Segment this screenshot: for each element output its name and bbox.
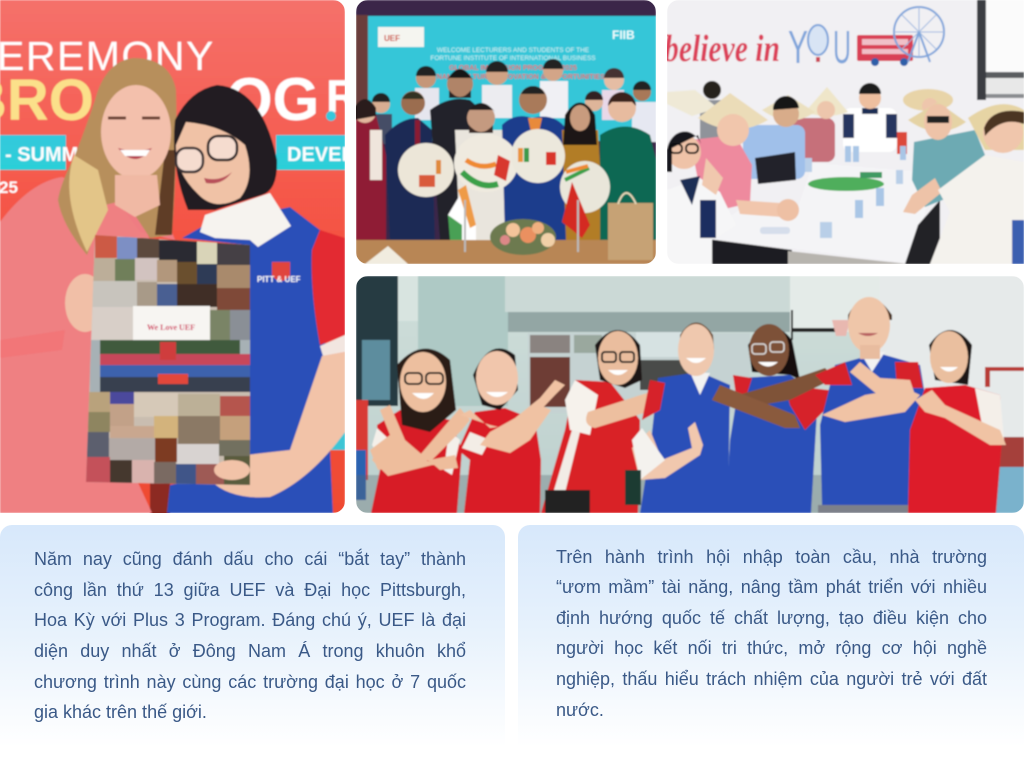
projection screen: FIIB bbox=[612, 28, 635, 42]
left paragraph: Năm nay cũng đánh dấu cho cái “bắt tay” thành bbox=[34, 549, 466, 569]
wall slogan: Y bbox=[788, 21, 808, 73]
student 1 in red bbox=[370, 349, 470, 513]
front students bbox=[667, 93, 1024, 264]
left student in pink ao dai bbox=[0, 58, 176, 513]
right paragraph: người học kết nối tri thức, mở rộng cơ hội nghề bbox=[556, 638, 987, 658]
backdrop banner text bbox=[0, 33, 359, 515]
projection screen bbox=[368, 16, 656, 141]
photo collage bbox=[0, 0, 1024, 513]
left paragraph: chương trình này cùng các trường đại học ở 7 quốc bbox=[34, 672, 466, 692]
photo: students making heart gestures bbox=[356, 276, 1024, 513]
student 4 in blue bbox=[625, 322, 730, 513]
left paragraph: công lần thứ 13 giữa UEF và Đại học Pittsburgh, bbox=[34, 580, 466, 600]
right paragraph: “ươm mầm” tài năng, nâng tầm phát triển với nhiều bbox=[556, 577, 987, 597]
right paragraph: nghiệp, thấu hiểu trách nhiệm của người trẻ với đất bbox=[556, 669, 987, 689]
right student in blue and red polo: PITT & UEF bbox=[257, 275, 301, 284]
right paragraph: nước. bbox=[556, 700, 604, 720]
under-table legs bbox=[695, 200, 940, 264]
backdrop banner text: DEVEL bbox=[287, 144, 354, 166]
painted conical hats bbox=[398, 129, 610, 213]
left paragraph: diện duy nhất ở Đông Nam Á trong khuôn khổ bbox=[34, 641, 466, 661]
student 2 in red bbox=[458, 348, 565, 513]
front row of people bbox=[354, 69, 656, 252]
backdrop banner text: EREMONY bbox=[0, 33, 215, 79]
projection screen: VIETNAM - CULTURE, INNOVATION & OPPORTUNITIES bbox=[421, 74, 605, 81]
backdrop banner text: OG bbox=[226, 66, 319, 133]
gym background bbox=[356, 276, 1024, 513]
backdrop banner text: - SUMM bbox=[5, 144, 78, 166]
right paragraph bbox=[556, 547, 987, 720]
text panel: left bbox=[0, 525, 505, 747]
wall slogan: U bbox=[833, 21, 851, 73]
projection screen: GLOBAL IMMERSION PROGRAM 2025 bbox=[449, 65, 577, 72]
left paragraph: Hoa Kỳ với Plus 3 Program. Đáng chú ý, UEF là đại bbox=[34, 610, 466, 630]
student 5 in blue and red bbox=[711, 323, 830, 513]
backdrop banner text: R bbox=[326, 70, 359, 122]
collage book: We Love UEF bbox=[147, 323, 195, 332]
projection screen: UEF bbox=[384, 34, 400, 43]
text panel: right bbox=[518, 525, 1024, 747]
student 6 in blue and red bbox=[815, 297, 925, 513]
right paragraph: Trên hành trình hội nhập toàn cầu, nhà trường bbox=[556, 547, 987, 567]
fingers on book bbox=[214, 460, 250, 480]
wall slogan bbox=[664, 7, 944, 73]
photo: delegation with painted conical hats bbox=[354, 0, 656, 264]
left paragraph: gia khác trên thế giới. bbox=[34, 702, 207, 722]
student 7 in red bbox=[908, 330, 1006, 513]
collage book bbox=[80, 230, 255, 490]
photo: two students holding a collage book bbox=[0, 0, 359, 515]
projection screen: FORTUNE INSTITUTE OF INTERNATIONAL BUSINESS bbox=[430, 55, 596, 62]
projection screen: WELCOME LECTURERS AND STUDENTS OF THE bbox=[437, 47, 590, 54]
window frame bbox=[977, 0, 1024, 100]
back row of people bbox=[372, 59, 656, 144]
back students bbox=[667, 81, 953, 184]
photo: students in conical hats at a table bbox=[664, 0, 1024, 264]
student 3 in red and white bbox=[540, 329, 648, 513]
wall slogan: believe in bbox=[664, 28, 780, 70]
left paragraph bbox=[34, 548, 466, 722]
table with flowers and flags bbox=[356, 182, 656, 264]
right paragraph: định hướng quốc tế chất lượng, tạo điều kiện cho bbox=[556, 608, 987, 628]
table with lanyards and bottles bbox=[760, 144, 907, 238]
right student in blue and red polo bbox=[167, 85, 345, 513]
